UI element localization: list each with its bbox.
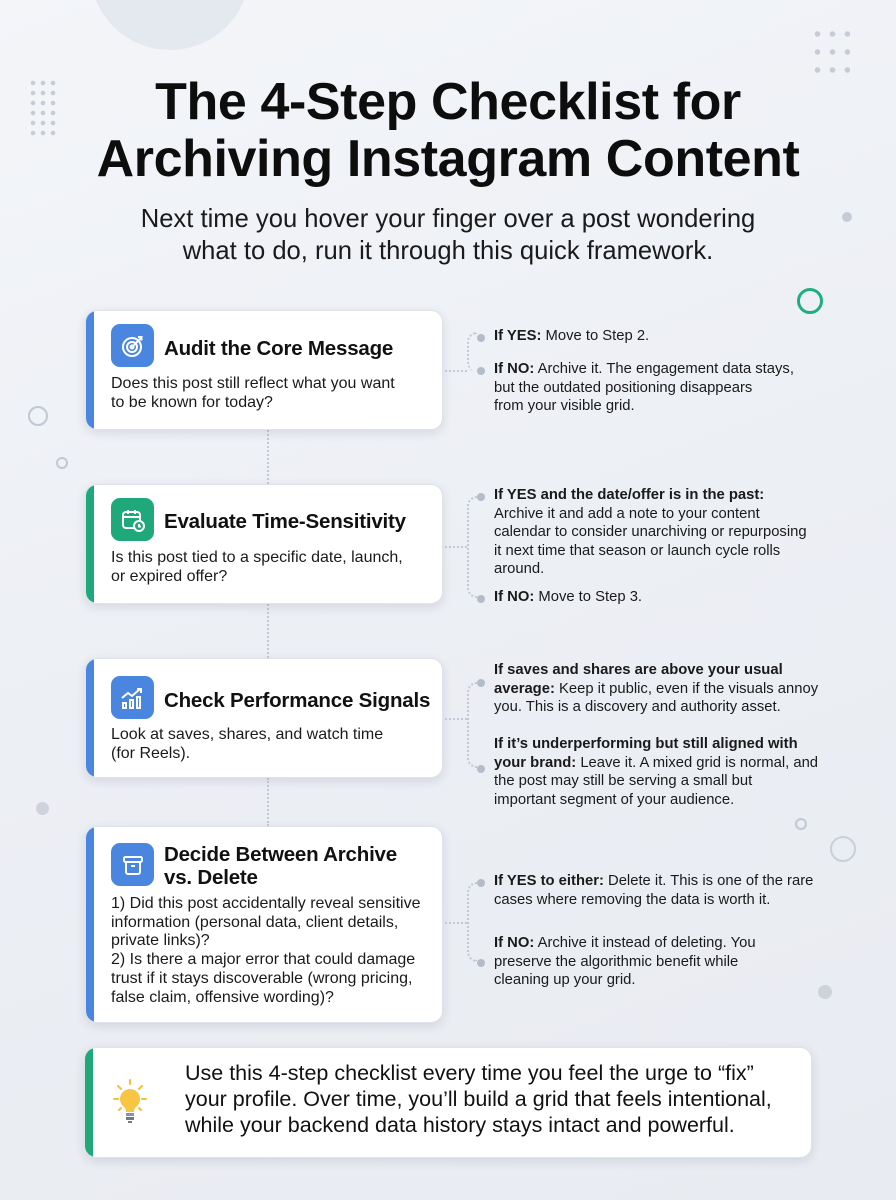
step question bbox=[111, 726, 383, 762]
outcomes step 2: Archive it and add a note to your content bbox=[494, 506, 760, 522]
step question: Look at saves, shares, and watch time bbox=[111, 726, 383, 743]
outcomes step 1: If YES: Move to Step 2. bbox=[494, 328, 649, 344]
outcomes step 1: from your visible grid. bbox=[494, 398, 635, 414]
panel: step 2 bbox=[85, 484, 443, 604]
icon: calendar bbox=[111, 498, 154, 541]
decorative circle top-left bbox=[90, 0, 250, 50]
outcomes step 1: but the outdated positioning disappears bbox=[494, 380, 752, 396]
connectors bbox=[267, 430, 269, 484]
outcomes step 4: cleaning up your grid. bbox=[494, 972, 635, 988]
outcomes step 3: If it’s underperforming but still aligned with bbox=[494, 736, 798, 752]
outcomes step 1 bbox=[445, 328, 794, 414]
step question bbox=[111, 549, 403, 585]
step question: Is this post tied to a specific date, launch, bbox=[111, 549, 403, 566]
step question: (for Reels). bbox=[111, 745, 190, 762]
step question bbox=[111, 375, 395, 411]
outcomes step 4: preserve the algorithmic benefit while bbox=[494, 954, 738, 970]
outcomes step 2 bbox=[445, 487, 807, 605]
step title: vs. Delete bbox=[164, 866, 258, 889]
step title: Check Performance Signals bbox=[164, 689, 430, 712]
outcomes step 3: If saves and shares are above your usual bbox=[494, 662, 783, 678]
outcomes step 2: it next time that season or launch cycle rolls bbox=[494, 543, 780, 559]
step title: Audit the Core Message bbox=[164, 337, 393, 360]
step question: or expired offer? bbox=[111, 568, 227, 585]
icon: target bbox=[111, 324, 154, 367]
outcomes step 1: If NO: Archive it. The engagement data stays, bbox=[494, 361, 794, 377]
outcomes step 2: calendar to consider unarchiving or repurposing bbox=[494, 524, 807, 540]
step question: information (personal data, client details, bbox=[111, 914, 398, 931]
subtitle: Next time you hover your finger over a post wondering bbox=[141, 205, 755, 233]
step title: Decide Between Archive bbox=[164, 843, 397, 866]
step question: 2) Is there a major error that could damage bbox=[111, 951, 415, 968]
icon: archive box bbox=[111, 843, 154, 886]
step question: false claim, offensive wording)? bbox=[111, 989, 334, 1006]
callout: summary bbox=[84, 1047, 812, 1158]
step question: private links)? bbox=[111, 932, 210, 949]
outcomes step 2: If NO: Move to Step 3. bbox=[494, 589, 642, 605]
summary text bbox=[185, 1061, 772, 1137]
step question bbox=[111, 895, 420, 1006]
decorative dot grid left bbox=[28, 78, 60, 138]
outcomes step 4: cases where removing the data is worth it. bbox=[494, 892, 770, 908]
outcomes step 3: your brand: Leave it. A mixed grid is normal, and bbox=[494, 755, 818, 771]
outcomes step 3: you. This is a discovery and authority asset. bbox=[494, 699, 781, 715]
title: The 4-Step Checklist for bbox=[155, 73, 741, 131]
step question: Does this post still reflect what you want bbox=[111, 375, 395, 392]
outcomes step 4: If NO: Archive it instead of deleting. You bbox=[494, 935, 756, 951]
decorative dot grid right bbox=[810, 25, 850, 77]
title: Archiving Instagram Content bbox=[97, 130, 799, 188]
decorative teal ring bbox=[797, 288, 823, 314]
outcomes step 3 bbox=[445, 662, 818, 808]
summary text: Use this 4-step checklist every time you feel the urge to “fix” bbox=[185, 1061, 754, 1085]
outcomes step 4 bbox=[445, 873, 813, 988]
step question: to be known for today? bbox=[111, 394, 273, 411]
outcomes step 3: average: Keep it public, even if the visuals annoy bbox=[494, 681, 818, 697]
panel: step 1 bbox=[85, 310, 443, 430]
panel: step 4 bbox=[85, 826, 443, 1023]
step question: trust if it stays discoverable (wrong pricing, bbox=[111, 970, 412, 987]
outcomes step 4: If YES to either: Delete it. This is one of the rare bbox=[494, 873, 813, 889]
outcomes step 2: around. bbox=[494, 561, 544, 577]
subtitle: what to do, run it through this quick framework. bbox=[183, 237, 713, 265]
summary text: your profile. Over time, you’ll build a grid that feels intentional, bbox=[185, 1087, 772, 1111]
step title: Evaluate Time-Sensitivity bbox=[164, 510, 406, 533]
icon: light bulb bbox=[113, 1079, 147, 1123]
outcomes step 3: important segment of your audience. bbox=[494, 792, 734, 808]
summary text: while your backend data history stays intact and powerful. bbox=[185, 1113, 735, 1137]
panel: step 3 bbox=[85, 658, 443, 778]
step question: 1) Did this post accidentally reveal sensitive bbox=[111, 895, 420, 912]
step title bbox=[164, 843, 397, 889]
outcomes step 3: the post may still be serving a small but bbox=[494, 773, 752, 789]
subtitle bbox=[141, 205, 755, 265]
outcomes step 2: If YES and the date/offer is in the past: bbox=[494, 487, 764, 503]
title bbox=[97, 73, 800, 188]
icon: chart bbox=[111, 676, 154, 719]
